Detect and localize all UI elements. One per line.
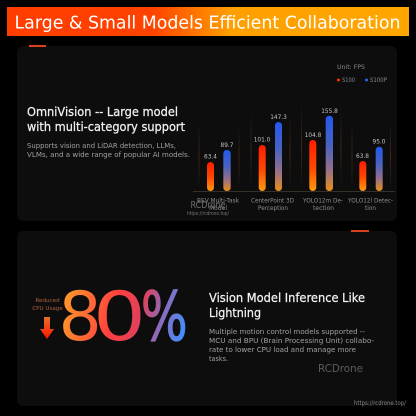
text block: Vision description: MCU and BPU (Brain Processing Unit) collabo- <box>209 336 374 345</box>
bars: CenterPoint 3D Perception <box>259 122 282 191</box>
heading: Vision Model: Lightning <box>209 306 261 320</box>
watermark: RCDrone <box>190 200 226 211</box>
callout: reduced CPU usage <box>32 298 63 339</box>
value labels: 147.3 <box>270 115 287 121</box>
heading: Vision Model <box>209 291 365 320</box>
icon: down arrow <box>40 317 54 339</box>
category labels: YOLO12m De- <box>302 198 343 204</box>
watermark: https://rcdrone.top/ <box>187 211 229 217</box>
watermark <box>187 200 229 217</box>
text block: Vision description <box>209 327 374 363</box>
category labels: Model <box>209 205 227 212</box>
big number: 80%: % <box>141 278 188 357</box>
legend: S100P <box>370 78 387 84</box>
category labels <box>197 198 393 212</box>
legend: Unit: FPS <box>337 65 365 71</box>
category labels: CenterPoint 3D <box>251 198 294 204</box>
legend: S100 <box>342 78 355 84</box>
category labels: tection <box>313 205 334 212</box>
bars: BEV Multi-Task Model <box>207 150 231 191</box>
callout: reduced CPU usage: CPU Usage <box>32 306 63 312</box>
big number: 80% <box>58 278 188 357</box>
heading: OmniVision: OmniVision -- Large model <box>27 105 178 119</box>
category labels: YOLO12l Detec- <box>347 198 393 204</box>
value labels: 104.8 <box>305 133 322 139</box>
value labels: 155.8 <box>321 109 338 115</box>
value labels: 89.7 <box>221 143 234 149</box>
value labels: 63.4 <box>204 154 217 160</box>
value labels: 101.0 <box>254 138 271 144</box>
text block: OmniVision description: VLMs, and a wide range of popular AI models. <box>27 150 190 159</box>
heading: OmniVision: with multi-category support <box>27 120 185 134</box>
text block: Vision description: Multiple motion control models supported -- <box>209 327 365 336</box>
text block: OmniVision description <box>27 141 190 159</box>
value labels: 63.8 <box>356 154 369 160</box>
big number: 80%: 8 <box>58 278 102 357</box>
bars: YOLO12m Detection <box>309 116 333 191</box>
text block: Vision description: rate to lower CPU load and manage more <box>209 345 356 354</box>
value labels <box>204 109 386 160</box>
title banner <box>7 7 409 36</box>
watermark url: https://rcdrone.top/ <box>354 400 407 407</box>
text block: Vision description: tasks. <box>209 354 228 363</box>
text block: OmniVision description: Supports vision and LiDAR detection, LLMs, <box>27 141 176 150</box>
heading: OmniVision <box>27 105 185 134</box>
bars: YOLO12l Detection <box>359 147 383 191</box>
category labels: tion <box>365 205 376 212</box>
category labels: Perception <box>258 205 288 212</box>
heading: Vision Model: Vision Model Inference Like <box>209 291 365 305</box>
title: Large & Small Models Efficient Collaboration <box>14 12 400 34</box>
value labels: 95.0 <box>373 140 386 146</box>
legend <box>337 65 387 84</box>
panel: OmniVision <box>17 45 397 221</box>
panel: Vision Model Inference <box>17 230 397 406</box>
callout: reduced CPU usage: Reduced <box>35 298 60 304</box>
category labels: BEV Multi-Task <box>197 198 239 204</box>
watermark: RCDrone <box>318 362 363 375</box>
bar chart: FPS <box>193 65 395 212</box>
big number: 80%: 0 <box>93 278 146 357</box>
